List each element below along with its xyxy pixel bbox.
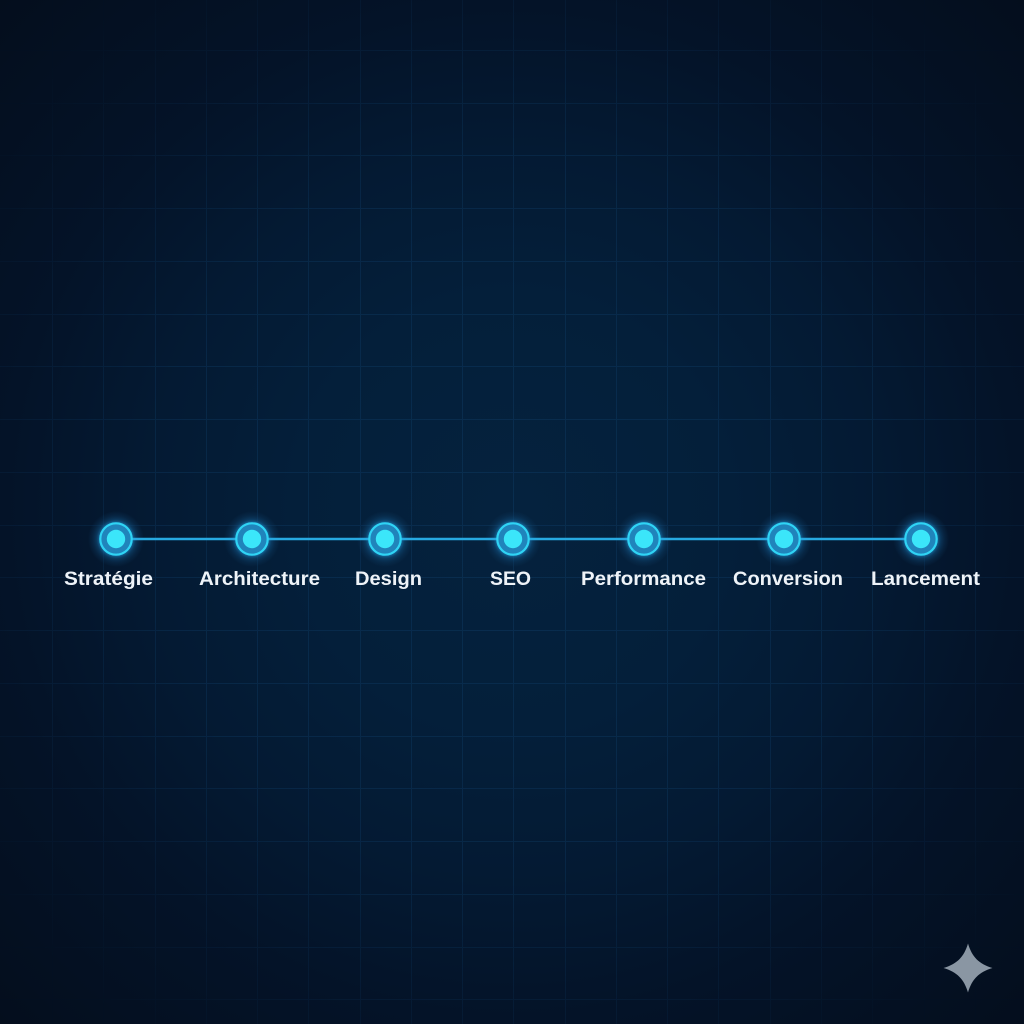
label: Stratégie: Stratégie <box>64 569 153 590</box>
node: Performance <box>628 523 660 555</box>
node: Lancement <box>905 523 937 555</box>
label: SEO: SEO <box>490 569 531 590</box>
icon: four-point sparkle <box>944 944 992 992</box>
node: Conversion <box>768 523 800 555</box>
node: Stratégie <box>100 523 132 555</box>
timeline <box>100 523 937 555</box>
connecting line <box>116 538 921 540</box>
label: Architecture: Architecture <box>199 569 320 590</box>
node: Design <box>369 523 401 555</box>
label: Conversion: Conversion <box>733 569 843 590</box>
label: Lancement: Lancement <box>871 569 981 590</box>
node: Architecture <box>236 523 268 555</box>
node glows <box>88 511 949 567</box>
label: Design: Design <box>355 569 422 590</box>
label: Performance: Performance <box>581 569 706 590</box>
node: SEO <box>497 523 529 555</box>
